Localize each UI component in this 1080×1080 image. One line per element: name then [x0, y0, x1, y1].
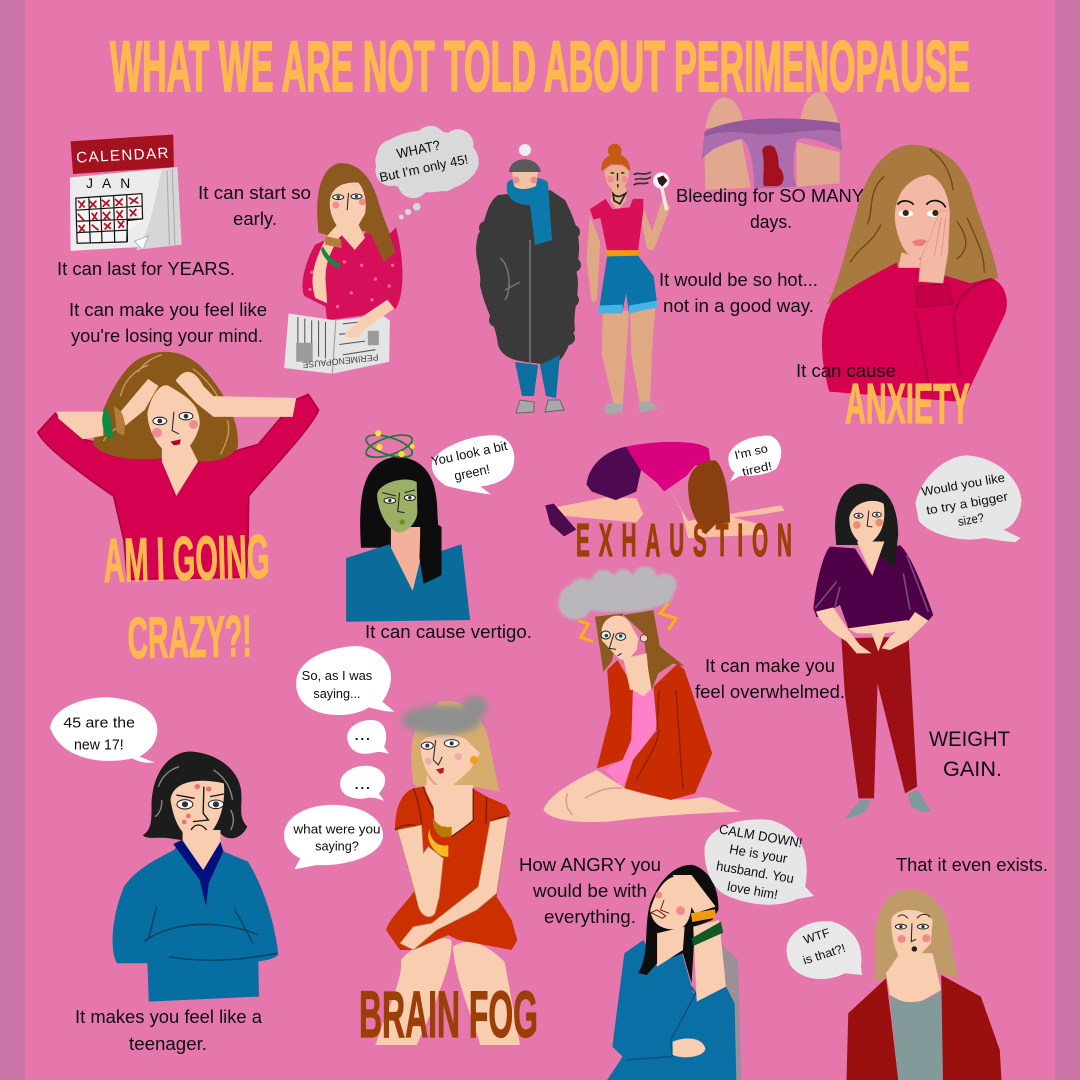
figure: woman holding her head — [38, 352, 319, 579]
figure: frowning woman with acne: new 17! — [74, 738, 124, 753]
figure: overwhelmed woman body — [543, 657, 741, 822]
figure: head of woman trying on clothes: to try a bigger — [925, 489, 1009, 518]
text: feel overwhelmed: feel overwhelmed. — [695, 682, 845, 702]
figure: confused woman asking wtf: WTF — [802, 926, 832, 947]
text: bleeding for so many days — [676, 186, 864, 232]
text: it can cause: It can cause — [796, 361, 896, 381]
figure: brain fog woman upper body — [386, 696, 517, 950]
figure: frowning woman with acne: 45 are the — [63, 716, 135, 731]
figure: woman in winter coat — [476, 144, 581, 413]
figure: angry woman on chair — [607, 819, 814, 1080]
text: it can last for years: It can last for YEARS. — [57, 259, 235, 279]
text: bleeding for so many days: days. — [750, 212, 792, 232]
figure: head of woman trying on clothes: Would you like — [920, 471, 1006, 499]
figure: legs and speech bubbles of brain fog woman — [284, 646, 520, 1045]
figure: angry woman on chair: love him! — [726, 879, 779, 902]
figure: legs and speech bubbles of brain fog woman: saying? — [315, 839, 359, 854]
figure: confused woman asking wtf — [787, 890, 1001, 1080]
figure: green dizzy woman: green! — [453, 461, 491, 483]
text: it makes you feel like a teenager — [75, 1007, 263, 1054]
figure: woman reading newspaper: But I'm only 45! — [378, 151, 469, 185]
figure: woman reading newspaper: WHAT? — [395, 138, 442, 161]
figure: anxious woman with hand on face — [822, 145, 1007, 402]
text: it can start so early: It can start so — [198, 183, 311, 203]
infographic poster: BRAIN FOG — [359, 977, 538, 1051]
figure: woman feeling hot with mirror — [586, 144, 670, 415]
text: how angry you would be: would be with — [532, 881, 647, 901]
figure: angry woman on chair: CALM DOWN! — [718, 822, 804, 850]
infographic poster: AM I GOING — [103, 523, 270, 596]
figure: frowning woman with acne — [50, 697, 278, 1002]
text: how angry you would be: everything. — [544, 907, 636, 927]
text: how angry you would be: How ANGRY you — [519, 855, 661, 875]
figure: legs and speech bubbles of brain fog woman: ... — [355, 777, 370, 792]
text: bleeding for so many days: Bleeding for SO MANY — [676, 186, 864, 206]
figure: legs and speech bubbles of brain fog woman: what were you — [292, 822, 381, 836]
figure: trousers of woman trying on clothes — [841, 637, 931, 818]
text: weight gain — [929, 728, 1010, 781]
figure: legs and speech bubbles of brain fog woman: saying... — [313, 686, 361, 701]
icon: calendar — [70, 134, 181, 251]
icon: calendar: CALENDAR — [76, 145, 169, 167]
icon: calendar: JAN — [86, 176, 130, 191]
figure: head of woman trying on clothes: size? — [957, 511, 985, 529]
text: feel overwhelmed: It can make you — [705, 656, 835, 676]
figure: angry woman on chair: husband. You — [715, 858, 795, 886]
figure: angry woman on chair: He is your — [728, 842, 789, 866]
figure: exhausted woman on hands and knees: I'm so — [733, 442, 770, 462]
figure: exhausted woman on hands and knees — [545, 436, 785, 538]
text: losing your mind: you're losing your mind. — [71, 326, 263, 346]
text: weight gain: GAIN. — [943, 758, 1002, 781]
text: it makes you feel like a teenager: It makes you feel like a — [75, 1007, 263, 1027]
figure: woman reading newspaper — [284, 126, 479, 374]
figure: top and arms of woman trying on clothes — [813, 545, 933, 653]
text: it can start so early: early. — [233, 209, 277, 229]
figure: legs and speech bubbles of brain fog woman: So, as I was — [302, 668, 372, 683]
text: that it even exists: That it even exists. — [896, 855, 1048, 875]
text: it makes you feel like a teenager: teenager. — [129, 1034, 207, 1054]
text: losing your mind: It can make you feel like — [69, 300, 267, 320]
figure: head of woman trying on clothes — [835, 455, 1021, 576]
text: it can start so early — [198, 183, 311, 229]
icon: grey cloud and lightning — [558, 566, 677, 642]
heading: exhaustion: EXHAUSTION — [576, 515, 792, 566]
text: losing your mind — [69, 300, 267, 346]
figure: overwhelmed woman head — [595, 610, 685, 690]
text: it would be so hot — [659, 270, 818, 316]
figure: green dizzy woman — [346, 430, 514, 622]
figure: legs and speech bubbles of brain fog woman: ... — [355, 728, 370, 743]
infographic poster: CRAZY?! — [127, 604, 252, 671]
figure: woman reading newspaper: PERIMENOPAUSE — [302, 352, 379, 370]
figure: underwear with blood stain — [701, 92, 842, 190]
figure: exhausted woman on hands and knees: tired! — [741, 459, 773, 479]
text: feel overwhelmed — [695, 656, 845, 702]
text: how angry you would be — [519, 855, 661, 927]
text: it would be so hot: not in a good way. — [663, 296, 814, 316]
text: weight gain: WEIGHT — [929, 728, 1010, 751]
text: it would be so hot: It would be so hot... — [659, 270, 818, 290]
text: it can cause vertigo: It can cause vertigo. — [365, 622, 532, 642]
figure: green dizzy woman: You look a bit — [430, 438, 509, 469]
figure: confused woman asking wtf: is that?! — [801, 941, 847, 967]
